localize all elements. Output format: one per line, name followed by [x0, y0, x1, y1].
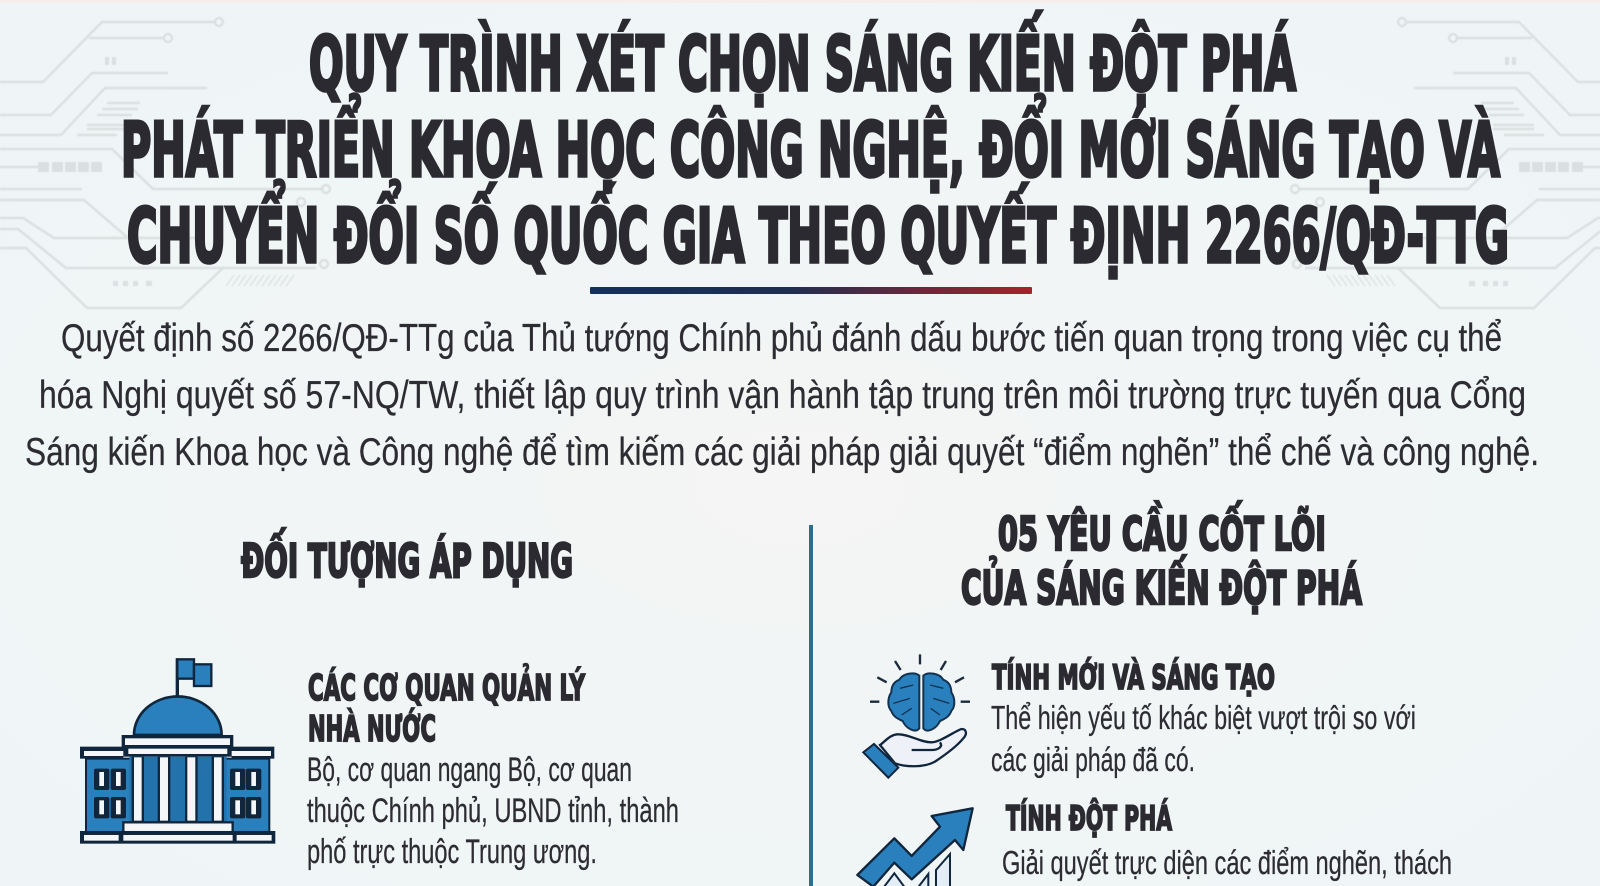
requirement 1 text: Thể hiện yếu tố khác biệt vượt trội so với	[991, 699, 1416, 736]
agency item text: NHÀ NƯỚC	[308, 708, 436, 750]
title underline	[590, 287, 1032, 294]
icon: brain over hand	[863, 654, 970, 778]
icon: growth arrow and bars	[857, 808, 973, 886]
agency item text: thuộc Chính phủ, UBND tỉnh, thành	[307, 792, 679, 830]
agency item text: CÁC CƠ QUAN QUẢN LÝ	[308, 663, 585, 709]
requirement 2 text: TÍNH ĐỘT PHÁ	[1006, 798, 1172, 839]
icon: government building	[80, 658, 275, 844]
requirement 1 text: các giải pháp đã có.	[991, 741, 1195, 778]
agency item text	[307, 663, 679, 871]
requirement 1 text: TÍNH MỚI VÀ SÁNG TẠO	[992, 657, 1275, 698]
right heading: CỦA SÁNG KIẾN ĐỘT PHÁ	[961, 555, 1362, 615]
agency item text: phố trực thuộc Trung ương.	[307, 833, 597, 871]
center divider	[809, 525, 813, 886]
right heading: 05 YÊU CẦU CỐT LÕI	[998, 501, 1326, 561]
agency item text: Bộ, cơ quan ngang Bộ, cơ quan	[307, 751, 632, 789]
decorative circuit right	[1291, 18, 1600, 308]
requirement 1 text	[991, 657, 1416, 778]
decorative circuit left	[0, 18, 330, 308]
requirement 2 text	[1002, 798, 1452, 881]
intro paragraph	[25, 317, 1539, 474]
right heading	[961, 501, 1362, 615]
left heading: ĐỐI TƯỢNG ÁP DỤNG	[241, 528, 573, 588]
title	[121, 11, 1509, 280]
